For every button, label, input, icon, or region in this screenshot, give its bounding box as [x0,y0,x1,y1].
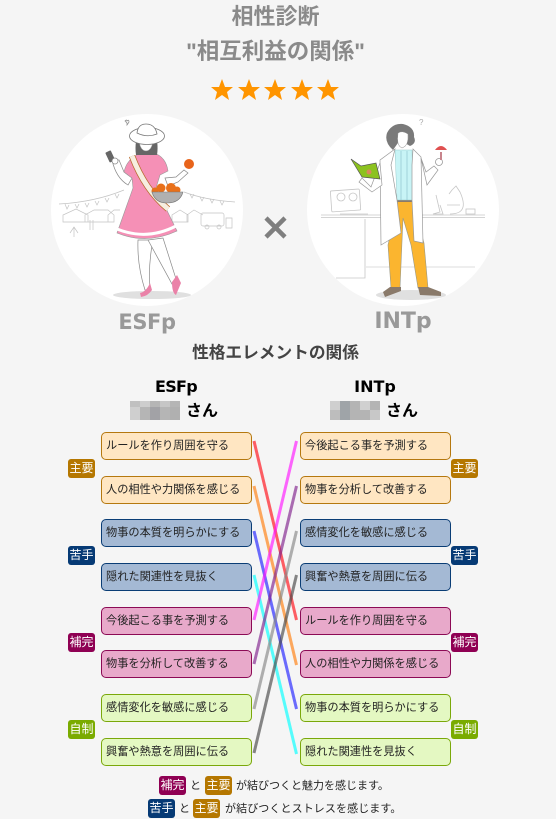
connector text: と [179,803,190,815]
element box [300,519,451,547]
element box: 感情変化を敏感に感じる [305,527,428,539]
badge: complement: 補完 [160,778,184,792]
badge: weak: 苦手 [149,801,174,815]
element box: 感情変化を敏感に感じる [106,702,229,714]
badge: main: 主要 [69,461,94,475]
element box: 今後起こる事を予測する [305,440,428,452]
element box [101,432,252,460]
element box: 人の相性や力関係を感じる [305,658,439,670]
badge: main [205,776,232,795]
icon: five stars [211,79,339,100]
element box: 隠れた関連性を見抜く [106,571,218,583]
legend line 2 [148,799,402,818]
element box: 興奮や熱意を周囲に伝る [106,746,229,758]
element box [300,563,451,591]
badge: main: 主要 [194,801,218,815]
element box [101,476,252,504]
label: INTp: INTp [374,309,432,334]
element box [300,607,451,635]
illustration: ESFp woman at market [51,114,243,306]
icon: blurred name left [130,401,180,420]
badge: main [193,799,220,818]
element box: 物事を分析して改善する [106,658,229,670]
element box [101,738,252,766]
badge: complement: 補完 [452,635,476,649]
legend text: が結びつくと魅力を感じます。 [236,780,389,792]
element box: ルールを作り周囲を守る [106,440,229,452]
right element list [300,432,478,766]
element box [101,563,252,591]
label: ESFp: ESFp [118,310,176,334]
element box [101,694,252,722]
element box [101,650,252,678]
subtitle: "相互利益の関係" [186,39,365,64]
section heading: 性格エレメントの関係 [192,343,359,362]
element box [300,650,451,678]
badge: weak [451,546,478,565]
element box [101,519,252,547]
element box: 興奮や熱意を周囲に伝る [305,571,428,583]
legend line 1 [159,776,389,795]
illustration: INTp scientist [307,114,499,306]
badge: weak: 苦手 [69,548,94,562]
badge: main: 主要 [452,461,476,475]
badge: self-control: 自制 [452,722,476,736]
badge: complement [159,776,186,795]
left element list [68,432,252,766]
badge: main [68,459,95,478]
icon: blurred name right [330,401,380,420]
element box: 物事を分析して改善する [305,484,428,496]
element box [300,476,451,504]
element box [300,694,451,722]
connector text: と [190,780,201,792]
element box [300,738,451,766]
illustration: INTp scientist: ? [419,118,424,127]
icon: multiply sign [266,218,285,237]
element box [300,432,451,460]
element box [101,607,252,635]
badge: self-control [451,720,478,739]
badge: weak [68,546,95,565]
legend text: が結びつくとストレスを感じます。 [225,803,402,815]
badge: complement [451,633,478,652]
badge: complement: 補完 [69,635,94,649]
badge: self-control [68,720,95,739]
column head: ESFp: ESFp [155,377,197,396]
badge: weak [148,799,175,818]
element box: 今後起こる事を予測する [106,615,229,627]
badge: complement [68,633,95,652]
element box: ルールを作り周囲を守る [305,615,428,627]
badge: self-control: 自制 [69,722,94,736]
name suffix left: さん [186,403,218,420]
column head: INTp: INTp [354,377,396,396]
element box: 物事の本質を明らかにする [106,527,240,539]
badge: weak: 苦手 [452,548,476,562]
element box: 隠れた関連性を見抜く [305,746,417,758]
name suffix right: さん [386,403,418,420]
badge: main: 主要 [206,778,230,792]
title: 相性診断 [231,4,320,29]
element box: 物事の本質を明らかにする [305,702,439,714]
badge: main [451,459,478,478]
element box: 人の相性や力関係を感じる [106,484,240,496]
